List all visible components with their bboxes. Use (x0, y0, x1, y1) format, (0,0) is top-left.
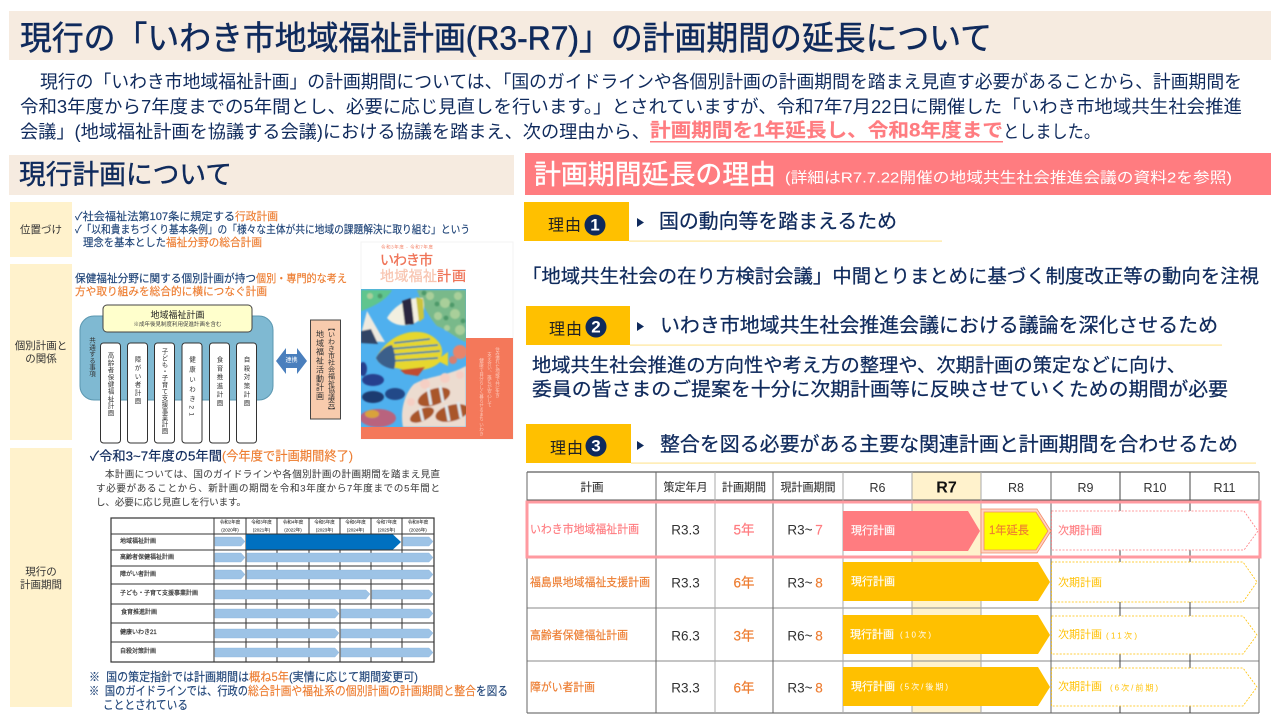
table header: 計画期間 (722, 480, 766, 494)
cover motto: 住み慣れた地域で共に生き (495, 346, 500, 398)
plan box labels: 高齢者保健福祉計画 (106, 351, 114, 417)
heading: current plan: 現行計画について (19, 160, 232, 190)
text block: positioning: ✓「以和貴まちづくり基本条例」の「様々な主体が共に地域の課題解決に取り組む」という (75, 222, 470, 236)
reason 2 text: 委員の皆さまのご提案を十分に次期計画等に反映させていくための期間が必要 (532, 378, 1228, 400)
plan box labels (106, 348, 250, 435)
period table header: (2026年) (409, 526, 427, 534)
heading: current plan (9, 155, 514, 195)
text block: plan excerpt (96, 468, 440, 508)
period table header: (2025年) (378, 526, 396, 534)
table header: R9 (1078, 481, 1094, 495)
cover motto: 支え合い、誰もが安心して (487, 351, 492, 407)
label: current plan period: 計画期間 (20, 579, 62, 591)
row: senior plan: (10次) (900, 630, 931, 640)
notes: ※ 国のガイドラインでは、行政の (89, 684, 248, 698)
reason 1: 国の動向等を踏まえるため (659, 210, 897, 233)
emperor angelfish (376, 332, 448, 370)
extension arrow (981, 509, 1051, 553)
period table header: (2022年) (284, 526, 302, 534)
period table header: 令和5年度 (314, 518, 335, 526)
period table header: 令和3年度 (251, 518, 272, 526)
panel: reasons for extension (522, 153, 1271, 713)
intro text block (20, 72, 1242, 142)
row: Fukushima plan: 8 (815, 576, 823, 590)
title: 現行の「いわき市地域福祉計画(R3-R7)」の計画期間の延長について (20, 20, 992, 56)
heading: plan period: ✓令和3~7年度の5年間 (90, 448, 222, 464)
row: senior plan: 3年 (733, 628, 755, 644)
row: senior plan: 現行計画 (850, 627, 894, 641)
icon: number 2: 2 (591, 318, 601, 336)
notes: ※ 国の策定指針では計画期間は (89, 669, 249, 684)
row: disability plan: 障がい者計画 (530, 680, 595, 694)
text block: relation (75, 271, 347, 298)
row: Iwaki regional welfare plan: R3.3 (671, 522, 700, 538)
next plan arrow: 次期計画 (1058, 523, 1102, 537)
row: senior plan: 次期計画 (1058, 627, 1102, 641)
heading: reasons: (詳細はR7.7.22開催の地域共生社会推進会議の資料2を参照) (785, 168, 1232, 186)
table header (580, 480, 1236, 496)
pale coral (402, 366, 466, 427)
chart: plan period table (111, 518, 434, 662)
row: disability plan (530, 667, 1257, 706)
plan box labels: 健康いわき21 (188, 355, 196, 416)
table header: R7 (936, 480, 957, 496)
plan box labels: 障がい者計画 (133, 355, 141, 405)
table header: 現計画期間 (780, 480, 836, 494)
notes: 概ね5年 (249, 670, 289, 684)
period table header: 令和6年度 (345, 518, 366, 526)
row: Iwaki regional welfare plan: いわき市地域福祉計画 (530, 522, 639, 536)
notes: 総合計画や福祉系の個別計画の計画期間と整合 (248, 683, 476, 698)
icon: number 3 (586, 436, 606, 456)
period table row labels: 自殺対策計画 (120, 647, 156, 655)
intro text block: 現行の「いわき市地域福祉計画」の計画期間については、「国のガイドラインや各個別計画の計画期間を踏まえ見直す必要があることから、計画期間を (40, 72, 1242, 92)
plan box labels: 自殺対策計画 (242, 355, 250, 407)
period table row labels: 高齢者保健福祉計画 (120, 553, 174, 561)
heading: reasons (525, 153, 1271, 195)
panel: current plan (9, 155, 514, 712)
table header: R8 (1008, 481, 1024, 495)
table: related plans and periods (527, 472, 1260, 713)
table header: 計画 (580, 480, 604, 494)
row: Iwaki regional welfare plan: 現行計画 (851, 523, 895, 537)
book cover: 令和3年度 - 令和7年度 (381, 244, 434, 250)
row: Iwaki regional welfare plan: 7 (815, 522, 823, 538)
text block: positioning: 福祉分野の総合計画 (166, 235, 262, 249)
row: disability plan: R3~ (787, 680, 813, 696)
text block: positioning (75, 209, 470, 249)
banner fish (361, 311, 385, 342)
row: Iwaki regional welfare plan: 5年 (733, 522, 755, 538)
intro text block: としました。 (1003, 122, 1100, 142)
notes: (実情に応じて期間変更可) (289, 669, 418, 684)
text block: positioning: ✓社会福祉法第107条に規定する (75, 209, 235, 223)
arrow: cooperation: 連携 (285, 356, 298, 364)
green coral (417, 290, 466, 342)
row: disability plan: 次期計画 (1058, 679, 1102, 693)
box: regional welfare plan: 地域福祉計画 (150, 309, 205, 320)
plan box labels: 子ども・子育て支援事業計画 (160, 348, 168, 435)
row: senior plan (530, 615, 1257, 654)
box: social welfare council plan (310, 320, 340, 419)
current plan bar (246, 534, 401, 550)
extension arrow: 1年延長 (989, 523, 1029, 537)
period table header: 令和4年度 (283, 518, 304, 526)
period table row labels (120, 537, 198, 655)
moorish idol (387, 298, 424, 325)
intro text block: 計画期間を1年延長し、令和8年度まで (650, 118, 1003, 142)
notes: を図る (476, 684, 508, 698)
label: current plan period (10, 448, 72, 707)
reason 2 text: 地域共生社会推進の方向性や考え方の整理や、次期計画の策定などに向け、 (532, 354, 1186, 376)
table header: R10 (1144, 481, 1167, 495)
intro text block: 会議」(地域福祉計画を協議する会議)における協議を踏まえ、次の理由から、 (20, 122, 650, 142)
box: regional welfare plan (103, 305, 252, 332)
label: relation to individual plans (10, 264, 72, 440)
book cover: 計画 (437, 268, 466, 284)
book cover: いわき市 (380, 252, 433, 268)
row: senior plan: 高齢者保健福祉計画 (530, 628, 628, 642)
table header: R11 (1213, 481, 1236, 495)
text block: positioning: 行政計画 (235, 209, 278, 223)
icon: number 1 (584, 214, 606, 236)
table header: 策定年月 (664, 480, 708, 494)
icon: number 1: 1 (590, 216, 600, 234)
row: disability plan: R3.3 (671, 680, 700, 696)
notes: こととされている (103, 698, 188, 712)
reason 1 (524, 202, 942, 242)
row: Fukushima plan: 6年 (733, 576, 755, 590)
period table row labels: 地域福祉計画 (120, 537, 156, 545)
highlight frame (527, 502, 1260, 557)
small blue fish (362, 374, 384, 386)
reason 1 text: 「地域共生社会の在り方検討会議」中間とりまとめに基づく制度改正等の動向を注視 (522, 266, 1259, 288)
row: Fukushima plan: R3~ (787, 576, 813, 590)
cover motto (479, 346, 500, 436)
period table header: (2024年) (347, 526, 365, 534)
text block: plan excerpt: す必要があることから、新計画の期間を令和3年度から7年度までの5年間と (96, 482, 440, 494)
reason 3: 理由 (550, 440, 583, 458)
period table row labels: 障がい者計画 (120, 570, 156, 578)
label: current plan period: 現行の (25, 565, 57, 578)
text block: plan excerpt: 本計画については、国のガイドラインや各個別計画の計画期間を踏まえ見直 (105, 468, 440, 480)
period table header: 令和2年度 (220, 518, 241, 526)
reason 2 text (532, 354, 1228, 400)
box: social welfare council plan: 地域福祉活動計画 (316, 329, 324, 401)
cover painting: reef fish (359, 289, 470, 427)
period table header: 令和7年度 (376, 518, 397, 526)
row: senior plan: (11次) (1106, 630, 1137, 640)
label: relation to individual plans: の関係 (25, 352, 57, 365)
period table row labels: 子ども・子育て支援事業計画 (120, 589, 198, 597)
cover motto: 健康で自分らしく暮らせるまち いわき (479, 357, 484, 436)
text block: relation: 方や取り組みを総合的に横につなぐ計画 (75, 284, 267, 298)
book cover (359, 242, 513, 439)
reason 2 (526, 306, 1222, 346)
icon: number 2 (586, 316, 606, 338)
label: positioning: 位置づけ (20, 223, 62, 236)
text block: plan excerpt: し、必要に応じ見直しを行います。 (96, 496, 246, 508)
row: disability plan: 6年 (733, 680, 755, 696)
book cover: 地域福祉 (380, 268, 437, 284)
text block: positioning: 理念を基本とした (83, 235, 166, 249)
reason 3 (526, 424, 1256, 464)
clownfish (417, 386, 451, 408)
row: Fukushima plan (530, 562, 1257, 602)
period bars (215, 537, 433, 657)
plan box labels: 食育推進計画 (215, 356, 223, 407)
row: Iwaki regional welfare plan (530, 509, 1258, 553)
row: disability plan: 現行計画 (851, 679, 895, 693)
row: Fukushima plan: 現行計画 (851, 574, 895, 588)
row: Fukushima plan: R3.3 (671, 576, 700, 590)
label: common items: 共通する事項 (88, 336, 96, 378)
text block: relation: 個別・専門的な考え (256, 271, 347, 285)
period table header: (2020年) (221, 526, 239, 534)
table header: R6 (870, 481, 886, 495)
next plan arrow (1052, 511, 1258, 550)
period table header: 令和8年度 (408, 518, 429, 526)
icon: number 3: 3 (591, 436, 601, 456)
box: regional welfare plan: ※成年後見制度利用促進計画を含む (133, 320, 222, 328)
text block: relation: 保健福祉分野に関する個別計画が持つ (75, 271, 256, 285)
period table header: (2023年) (316, 526, 334, 534)
row: Fukushima plan: 福島県地域福祉支援計画 (530, 575, 650, 589)
label: positioning (10, 202, 72, 257)
heading: reasons: 計画期間延長の理由 (534, 160, 776, 190)
title (9, 11, 1271, 60)
heading: plan period: (今年度で計画期間終了) (222, 448, 353, 464)
plan boxes (100, 343, 256, 443)
row: senior plan: 8 (815, 628, 823, 644)
period table header (220, 518, 429, 534)
row: senior plan: R6.3 (671, 628, 700, 644)
row: disability plan: 8 (815, 680, 823, 696)
row: senior plan: R6~ (787, 628, 813, 644)
label: relation to individual plans: 個別計画と (15, 339, 67, 352)
intro text block: 令和3年度から7年度までの5年間とし、必要に応じ見直しを行います。」とされていますが、令和7年7月22日に開催した「いわき市地域共生社会推進 (20, 97, 1242, 117)
period table row labels: 健康いわき21 (120, 628, 157, 636)
reason 1: 理由 (548, 216, 581, 234)
reason 2: 理由 (549, 320, 582, 338)
arrow: cooperation (276, 348, 307, 374)
heading: plan period (90, 448, 353, 464)
period table header: (2021年) (253, 526, 271, 534)
reason 3: 整合を図る必要がある主要な関連計画と計画期間を合わせるため (660, 433, 1238, 456)
period table row labels: 食育推進計画 (121, 608, 157, 616)
row: Iwaki regional welfare plan: R3~ (787, 522, 813, 538)
row: disability plan: (5次/後期) (900, 682, 948, 692)
notes (89, 669, 508, 712)
diagram: plan relationship (80, 305, 340, 443)
row: disability plan: (6次/前期) (1110, 682, 1158, 692)
box: social welfare council plan: 【いわき市社会福祉協議会】 (328, 324, 335, 414)
reason 2: いわき市地域共生社会推進会議における議論を深化させるため (660, 314, 1218, 337)
row: Fukushima plan: 次期計画 (1058, 575, 1102, 589)
